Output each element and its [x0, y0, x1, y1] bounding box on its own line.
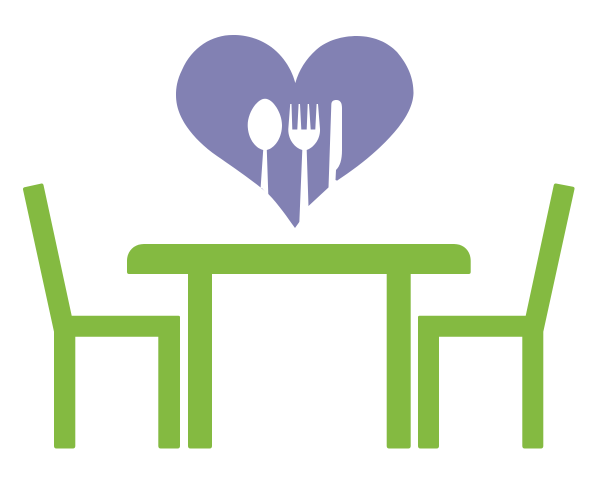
table leg: left: [188, 270, 212, 448]
icon: knife: [328, 100, 342, 188]
table top: [127, 244, 471, 274]
table: [127, 244, 471, 448]
table leg: right: [387, 270, 411, 448]
heart shape: [176, 35, 414, 228]
icon: heart with cutlery: [176, 35, 414, 228]
icon: fork: [288, 104, 320, 223]
left chair: [23, 183, 180, 448]
icon: spoon: [248, 99, 282, 195]
right chair: [418, 183, 575, 448]
